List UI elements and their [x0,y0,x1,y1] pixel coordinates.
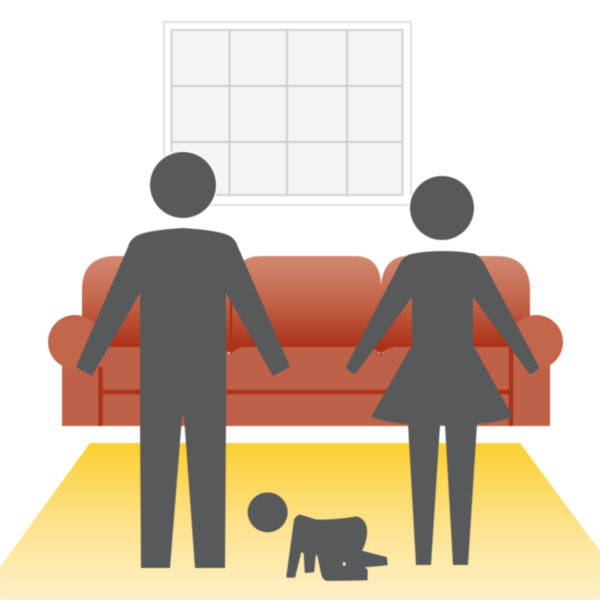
window [164,22,411,205]
baby body [287,516,387,580]
sofa arms [48,315,563,369]
sofa seams [100,347,511,426]
woman head [410,176,474,240]
man body [76,228,290,568]
man [76,152,290,568]
baby head [248,492,288,532]
sofa seat and base [62,347,550,426]
rug [0,443,600,600]
woman [346,176,539,565]
baby [248,492,387,580]
man head [150,152,216,218]
sofa [48,256,563,426]
sofa seam shadows [231,300,381,357]
sofa back cushions [82,256,530,352]
woman body [346,251,539,565]
